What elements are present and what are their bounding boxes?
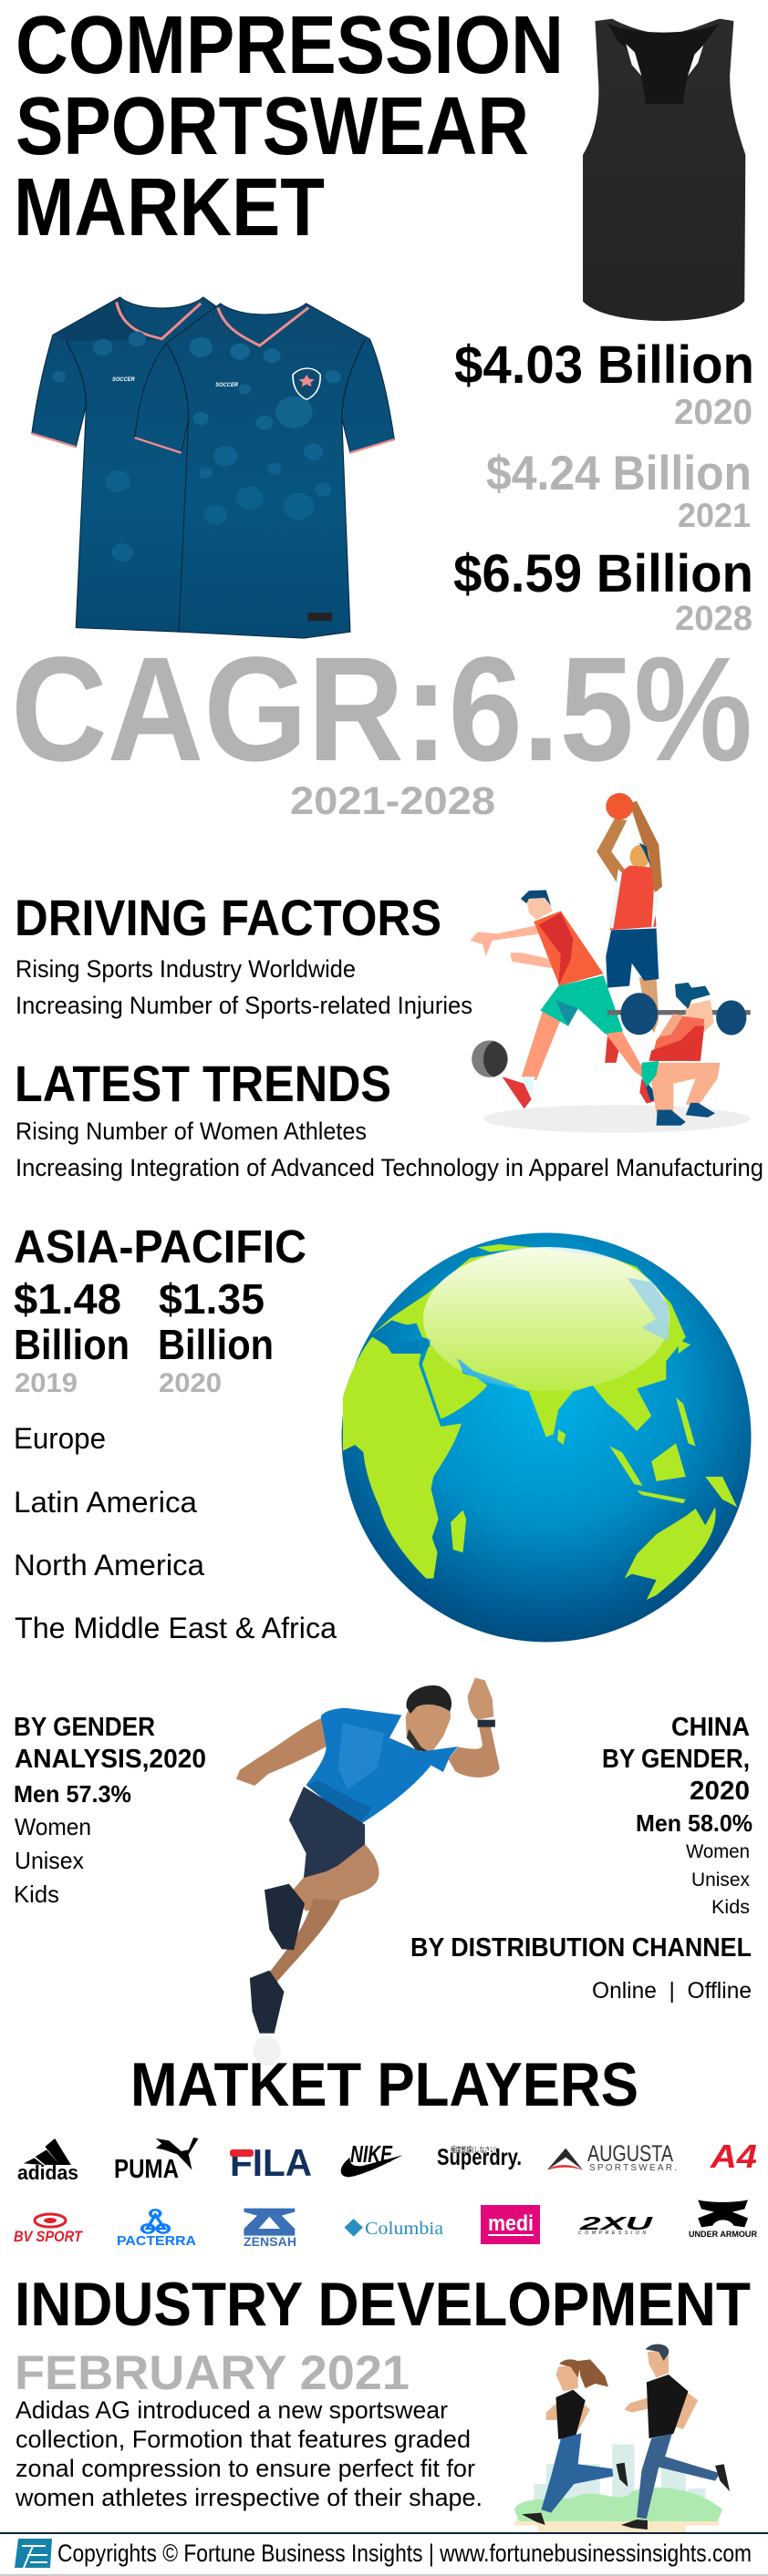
logo: augusta bbox=[547, 2141, 677, 2173]
company logos bbox=[14, 2138, 757, 2249]
2021 value bbox=[486, 447, 752, 534]
gender list: Kids bbox=[14, 1880, 59, 1908]
gender list: Unisex bbox=[15, 1847, 84, 1874]
logo: bv sport bbox=[14, 2214, 83, 2245]
icon: navy jerseys bbox=[32, 297, 394, 638]
logo: columbia: Columbia bbox=[365, 2219, 443, 2239]
development text: collection, Formotion that features graded bbox=[16, 2426, 471, 2453]
logo: pacterra: PACTERRA bbox=[117, 2233, 196, 2249]
logo: zensah bbox=[244, 2209, 296, 2249]
icon: black compression tank top bbox=[583, 19, 745, 321]
regional panel bbox=[14, 1221, 337, 1644]
market size figures bbox=[453, 335, 754, 638]
2020 value: 2020 bbox=[159, 1368, 222, 1398]
logo: medi bbox=[481, 2205, 540, 2244]
footer bbox=[0, 2532, 768, 2576]
development note bbox=[15, 2346, 483, 2511]
heading: market players: MATKET PLAYERS bbox=[130, 2050, 638, 2119]
logo: pacterra bbox=[117, 2210, 196, 2249]
gender list: Men 57.3% bbox=[14, 1780, 131, 1808]
China gender list bbox=[636, 1809, 752, 1918]
China gender list: Women bbox=[686, 1841, 750, 1862]
logo: bv sport: BV SPORT bbox=[14, 2228, 83, 2245]
2020 value bbox=[454, 335, 754, 432]
CAGR headline: 2021-2028 bbox=[290, 779, 495, 823]
logo: superdry: 極度乾燥(しなさい) bbox=[451, 2145, 497, 2154]
2028 value bbox=[453, 544, 753, 638]
region list: The Middle East & Africa bbox=[15, 1612, 337, 1644]
development text: zonal compression to ensure perfect fit for bbox=[16, 2455, 475, 2482]
heading: by gender: ANALYSIS,2020 bbox=[15, 1745, 206, 1774]
2028 value: $6.59 Billion bbox=[453, 544, 753, 603]
China gender list: Unisex bbox=[691, 1870, 750, 1891]
basketball player bbox=[597, 793, 662, 1063]
title: SPORTSWEAR bbox=[16, 81, 529, 172]
logo: 2xu: COMPRESSION bbox=[578, 2231, 646, 2236]
2021 value: 2021 bbox=[678, 497, 751, 534]
2028 value: 2028 bbox=[675, 600, 752, 638]
date heading: FEBRUARY 2021 bbox=[15, 2346, 410, 2400]
title: COMPRESSION bbox=[16, 0, 564, 91]
logo: under armour: UNDER ARMOUR bbox=[689, 2230, 757, 2239]
China by gender bbox=[602, 1713, 752, 1918]
2020 value: $4.03 Billion bbox=[454, 335, 754, 395]
title: MARKET bbox=[14, 162, 325, 253]
back jersey: SOCCER bbox=[112, 376, 135, 383]
gender list: Women bbox=[15, 1813, 91, 1840]
heading: China by gender: 2020 bbox=[690, 1777, 750, 1806]
factor list bbox=[16, 955, 472, 1019]
logo: zensah: ZENSAH bbox=[244, 2234, 296, 2249]
logo: adidas: adidas bbox=[17, 2161, 78, 2184]
back jersey bbox=[32, 297, 218, 632]
2020 value bbox=[158, 1275, 274, 1398]
China gender list: Kids bbox=[711, 1897, 750, 1918]
2020 value: $1.35 bbox=[159, 1275, 265, 1323]
development text: Adidas AG introduced a new sportswear bbox=[16, 2396, 448, 2424]
logo: fila: FILA bbox=[230, 2141, 312, 2184]
woman runner bbox=[522, 2359, 628, 2525]
distribution channel bbox=[410, 1933, 752, 2004]
heading: by gender: BY GENDER bbox=[14, 1713, 155, 1742]
distribution channel: Online | Offline bbox=[592, 1978, 752, 2004]
front jersey bbox=[135, 304, 394, 638]
logo: under armour bbox=[689, 2200, 757, 2239]
China gender list: Men 58.0% bbox=[636, 1809, 752, 1837]
heading: asia-pacific: ASIA-PACIFIC bbox=[14, 1221, 306, 1273]
icon: globe bbox=[341, 1232, 752, 1643]
2019 value: $1.48 bbox=[14, 1275, 121, 1323]
heading: China by gender: CHINA bbox=[671, 1713, 750, 1742]
2020 value: 2020 bbox=[674, 393, 752, 432]
gender list bbox=[14, 1780, 131, 1908]
factor list: Rising Sports Industry Worldwide bbox=[16, 955, 356, 983]
trend list: Rising Number of Women Athletes bbox=[16, 1118, 367, 1145]
heading: latest trends: LATEST TRENDS bbox=[15, 1055, 391, 1112]
man runner bbox=[621, 2344, 730, 2530]
development text bbox=[15, 2396, 483, 2511]
logo: nike bbox=[341, 2140, 402, 2177]
region list bbox=[14, 1422, 337, 1644]
distribution channel: BY DISTRIBUTION CHANNEL bbox=[410, 1933, 752, 1963]
2019 value: Billion bbox=[14, 1321, 130, 1368]
icon: sprinter bbox=[236, 1678, 500, 2066]
logo: A4: A4 bbox=[710, 2138, 757, 2175]
logo: superdry: Superdry. bbox=[437, 2145, 522, 2170]
logo: 2xu bbox=[578, 2214, 653, 2236]
region list: Europe bbox=[14, 1422, 106, 1455]
front jersey: SOCCER bbox=[215, 383, 238, 388]
development text: women athletes irrespective of their shape. bbox=[15, 2484, 483, 2511]
glass highlight bbox=[423, 1247, 669, 1391]
medicine ball bbox=[472, 1040, 508, 1077]
icon: athletes group bbox=[471, 793, 751, 1133]
player in green shorts bbox=[471, 890, 661, 1108]
2019 value: 2019 bbox=[15, 1368, 78, 1398]
logo: augusta: SPORTSWEAR. bbox=[589, 2163, 677, 2173]
barbell and squatting woman bbox=[607, 983, 751, 1126]
title bbox=[14, 0, 564, 253]
logo: augusta: AUGUSTA bbox=[587, 2141, 673, 2167]
2020 value: Billion bbox=[158, 1321, 274, 1368]
heading: China by gender: BY GENDER, bbox=[602, 1745, 750, 1774]
region list: Latin America bbox=[14, 1486, 197, 1519]
by gender analysis bbox=[14, 1713, 206, 1908]
logo: nike: NIKE bbox=[350, 2140, 392, 2168]
2019 value bbox=[14, 1275, 130, 1398]
2021 value: $4.24 Billion bbox=[486, 447, 752, 500]
trend list bbox=[16, 1118, 763, 1181]
heading: China by gender bbox=[602, 1713, 750, 1806]
region list: North America bbox=[14, 1549, 204, 1582]
heading: by gender bbox=[14, 1713, 206, 1774]
logo: puma bbox=[114, 2138, 198, 2184]
heading: driving factors: DRIVING FACTORS bbox=[15, 889, 441, 946]
driving factors bbox=[15, 889, 472, 1019]
factor list: Increasing Number of Sports-related Injuries bbox=[16, 992, 472, 1019]
logo: 2xu: 2XU bbox=[578, 2214, 653, 2234]
icon: joggers bbox=[514, 2344, 730, 2533]
logo: medi: medi bbox=[488, 2211, 534, 2236]
logo: adidas bbox=[17, 2138, 78, 2184]
logo: puma: PUMA bbox=[114, 2155, 179, 2184]
logo: Fortune Business Insights bbox=[15, 2539, 52, 2568]
latest trends bbox=[15, 1055, 763, 1181]
